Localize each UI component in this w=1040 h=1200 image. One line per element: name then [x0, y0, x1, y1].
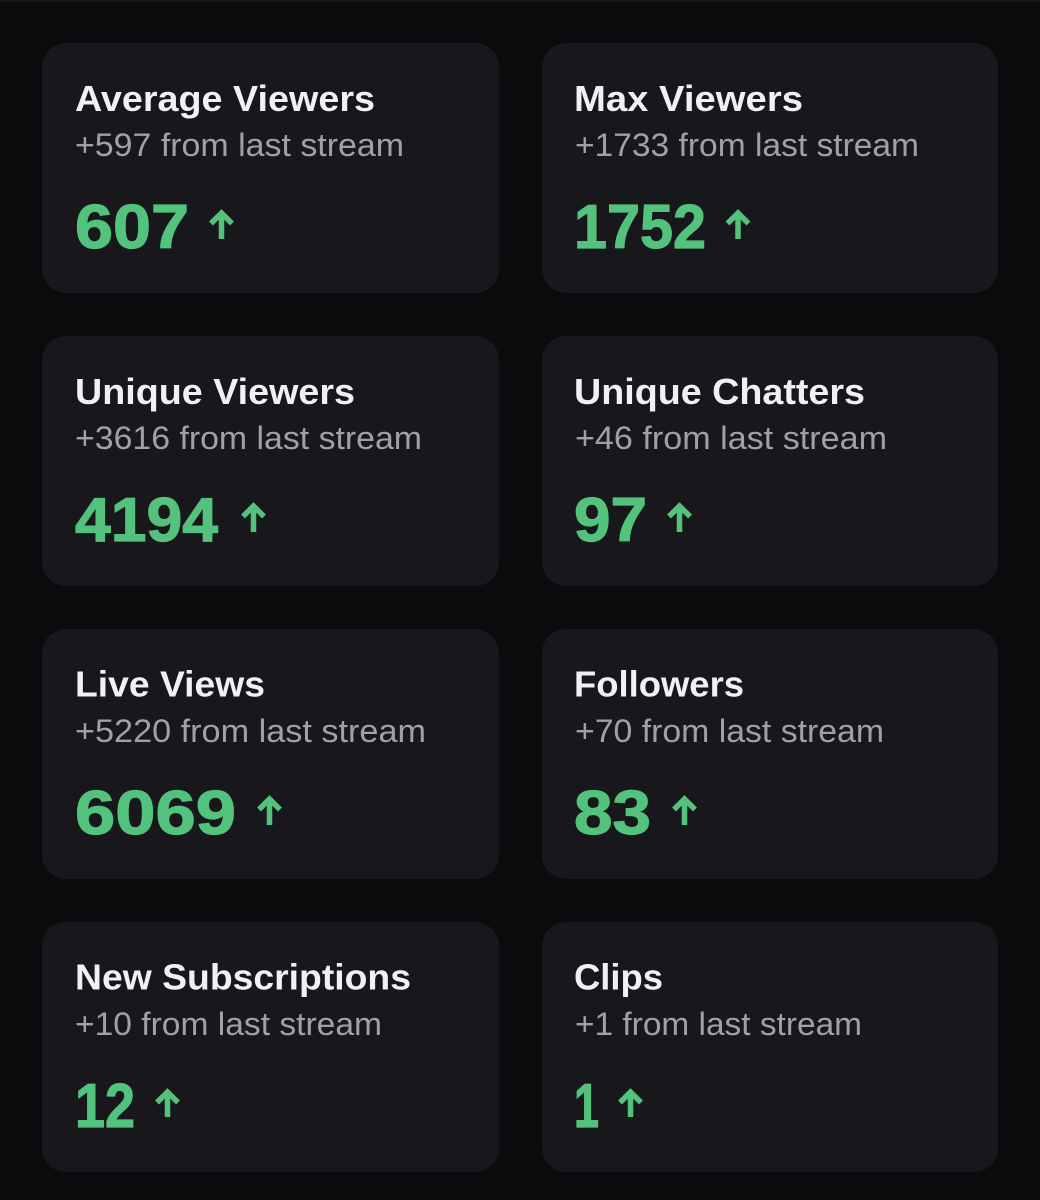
icon: up arrow	[674, 799, 695, 825]
panel: new subscriptions	[42, 922, 499, 1172]
value: 97: 97	[574, 486, 647, 555]
value: 6069: 6069	[75, 779, 236, 848]
panel: average viewers	[42, 43, 499, 293]
panel: unique chatters	[542, 336, 998, 586]
panel: live views	[42, 629, 499, 879]
heading: unique viewers: Unique Viewers	[75, 371, 355, 412]
heading: unique chatters: Unique Chatters	[574, 371, 865, 412]
value: 1752: 1752	[574, 193, 706, 262]
heading: followers: Followers	[574, 664, 744, 704]
icon: up arrow	[259, 799, 280, 825]
heading: max viewers: Max Viewers	[574, 78, 803, 119]
heading: live views: Live Views	[75, 664, 265, 704]
icon: up arrow	[728, 213, 748, 239]
heading: new subscriptions: New Subscriptions	[75, 956, 411, 998]
value: 12: 12	[75, 1072, 135, 1141]
icon: up arrow	[243, 506, 264, 532]
text: change from last stream: +1733 from last stream	[575, 127, 919, 163]
value: 4194: 4194	[75, 486, 219, 555]
value: 1: 1	[574, 1072, 599, 1141]
panel: clips	[542, 922, 998, 1172]
icon: up arrow	[211, 213, 232, 239]
text: change from last stream: +5220 from last stream	[75, 713, 426, 749]
text: change from last stream: +10 from last stream	[75, 1006, 382, 1042]
heading: clips: Clips	[574, 956, 663, 998]
icon: up arrow	[669, 506, 690, 532]
text: change from last stream: +3616 from last stream	[75, 420, 422, 456]
text: change from last stream: +46 from last stream	[575, 420, 887, 456]
text: change from last stream: +70 from last stream	[575, 713, 884, 749]
panel: unique viewers	[42, 336, 499, 586]
value: 607: 607	[75, 193, 189, 262]
value: 83: 83	[574, 779, 651, 848]
icon: up arrow	[620, 1092, 641, 1117]
panel: followers	[542, 629, 998, 879]
text: change from last stream: +597 from last stream	[75, 127, 404, 163]
text: change from last stream: +1 from last stream	[575, 1006, 862, 1042]
panel: max viewers	[542, 43, 998, 293]
icon: up arrow	[157, 1092, 178, 1117]
heading: average viewers: Average Viewers	[75, 78, 375, 119]
